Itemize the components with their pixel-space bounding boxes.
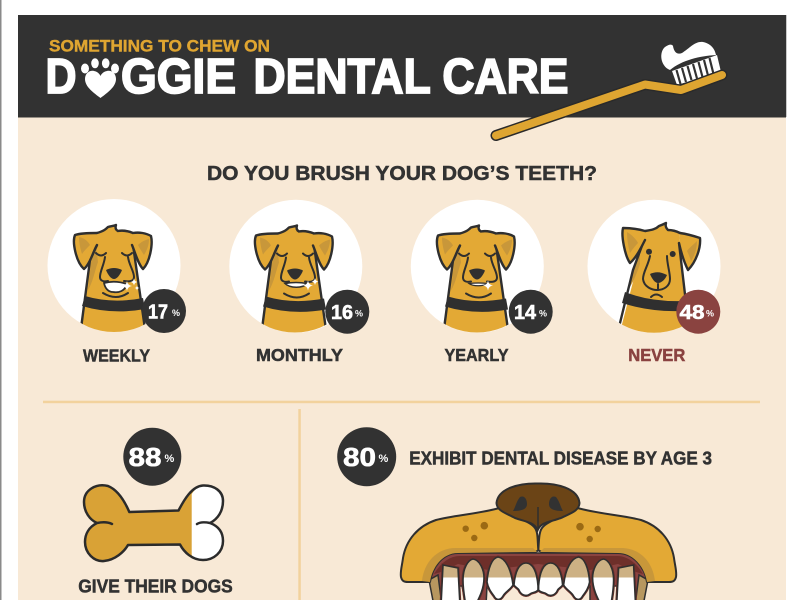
badge: 88%: 88 xyxy=(128,442,162,472)
panel: yearly xyxy=(411,200,553,365)
heading: brush question: DO YOU BRUSH YOUR DOG’S TEETH? xyxy=(207,163,597,185)
panel: weekly xyxy=(48,199,186,366)
illustration: dog muzzle with teeth xyxy=(401,483,676,600)
text: give their dogs: GIVE THEIR DOGS xyxy=(78,576,233,597)
gums xyxy=(430,553,647,600)
left page edge xyxy=(0,0,2,600)
label: monthly: MONTHLY xyxy=(256,345,343,365)
icon: smiling dog monthly xyxy=(255,226,333,336)
icon: smiling dog yearly xyxy=(437,226,515,336)
badge: 17%: % xyxy=(172,308,180,318)
whisker spots xyxy=(462,522,601,542)
badge: 48%: 48 xyxy=(680,302,704,324)
badge: 48% xyxy=(676,290,720,334)
upper lip xyxy=(401,507,676,582)
icon: paw with heart xyxy=(81,58,119,98)
text: exhibit dental disease: EXHIBIT DENTAL DISEASE BY AGE 3 xyxy=(409,448,712,468)
nose xyxy=(496,483,580,530)
badge: 88% xyxy=(123,428,181,486)
badge: 88%: % xyxy=(164,453,174,465)
label: yearly: YEARLY xyxy=(444,345,509,365)
badge: 14%: 14 xyxy=(514,302,537,324)
icon: smiling dog weekly xyxy=(74,225,152,336)
icon: sad dog never xyxy=(619,223,700,336)
main title xyxy=(46,50,568,104)
main title: DENTAL CARE xyxy=(254,50,568,104)
label: weekly: WEEKLY xyxy=(83,346,150,366)
cream background panel xyxy=(18,117,786,600)
header band xyxy=(18,15,787,118)
outer canines xyxy=(429,575,648,600)
badge: 16%: % xyxy=(355,309,363,319)
badge: 80% xyxy=(337,427,396,486)
badge: 14% xyxy=(509,290,553,334)
badge: 17% xyxy=(142,289,186,333)
badge: 14%: % xyxy=(539,309,547,319)
main title: D xyxy=(46,50,76,104)
badge: 48%: % xyxy=(706,309,714,319)
icon: bone 88 percent filled xyxy=(84,485,223,561)
panel: dental disease xyxy=(337,427,712,600)
panel: never xyxy=(588,200,720,365)
icon: toothbrush xyxy=(496,42,722,135)
badge: 17%: 17 xyxy=(148,302,168,324)
label: never: NEVER xyxy=(628,345,686,365)
header kicker: SOMETHING TO CHEW ON xyxy=(49,36,270,56)
main title: GGIE xyxy=(121,50,236,104)
badge: 80%: 80 xyxy=(343,442,376,472)
badge: 16%: 16 xyxy=(331,302,353,324)
badge: 80%: % xyxy=(378,453,388,465)
panel: monthly xyxy=(229,200,369,365)
panel: dental chews xyxy=(78,428,233,597)
teeth xyxy=(441,557,636,600)
badge: 16% xyxy=(325,290,369,334)
